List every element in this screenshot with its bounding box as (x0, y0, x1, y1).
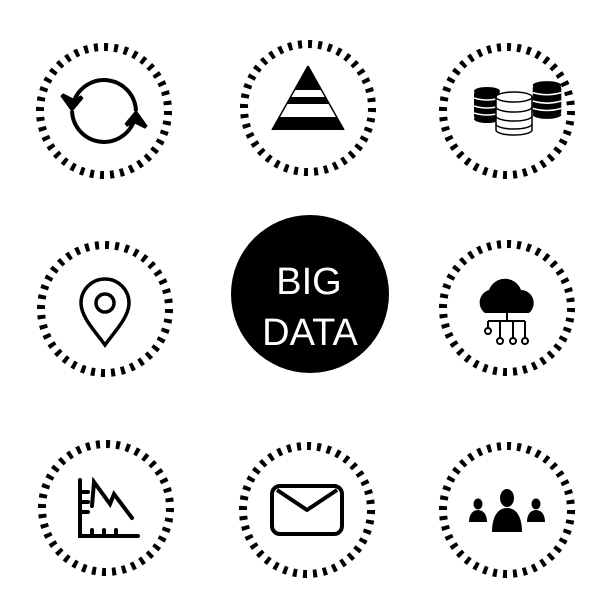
panel: pyramid icon (244, 44, 372, 172)
heading: BIG DATA: DATA (262, 312, 358, 354)
icon: database stacks (474, 81, 561, 135)
icon: group of people (469, 489, 545, 532)
icon: envelope (272, 486, 342, 534)
panel: cloud network icon (443, 244, 571, 372)
heading: BIG DATA: BIG (276, 261, 342, 303)
panel: sync icon (40, 47, 168, 175)
panel: center BIG DATA (231, 215, 389, 373)
icon: map pin (81, 279, 129, 345)
panel: mail icon (243, 446, 371, 574)
icon: declining chart (80, 480, 138, 536)
icon: cloud (480, 279, 534, 344)
icon: circular arrows (62, 80, 146, 142)
panel: chart icon (42, 444, 170, 572)
panel: location icon (41, 245, 169, 373)
icon: pyramid (272, 66, 344, 130)
panel: people icon (443, 446, 571, 574)
panel: database icon (443, 47, 571, 175)
